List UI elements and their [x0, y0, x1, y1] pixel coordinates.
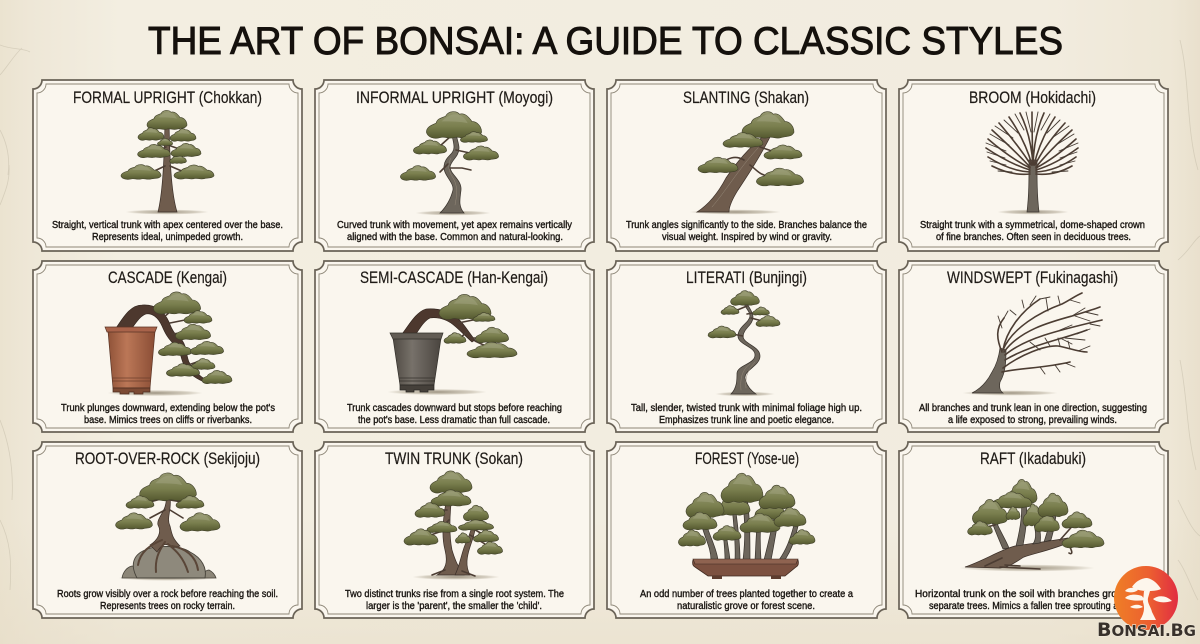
icon: broom tree [986, 112, 1078, 214]
heading: TWIN TRUNK (Sokan) [385, 450, 523, 468]
description: a life exposed to strong, prevailing winds. [948, 414, 1117, 426]
panel: raft [899, 442, 1168, 618]
logo: Bonsai.bg [1097, 566, 1196, 641]
description: Straight, vertical trunk with apex centered over the base. [52, 219, 283, 231]
description [57, 588, 278, 612]
description: An odd number of trees planted together to create a [640, 588, 853, 600]
description: of fine branches. Often seen in deciduous trees. [936, 231, 1131, 243]
icon: slanting tree [689, 112, 804, 214]
description: larger is the 'parent', the smaller the 'child'. [366, 600, 542, 612]
icon: root-over-rock tree [116, 473, 220, 581]
description: the pot's base. Less dramatic than full cascade. [358, 414, 550, 426]
icon: informal upright tree [400, 112, 499, 216]
icon: literati tree [708, 291, 780, 396]
description: Roots grow visibly over a rock before reaching the soil. [57, 588, 278, 600]
description [337, 219, 573, 243]
description: Trunk cascades downward but stops before reaching [347, 402, 562, 414]
icon: formal upright tree [121, 110, 214, 214]
icon: twin trunk tree [404, 471, 503, 580]
description: aligned with the base. Common and natural-looking. [347, 231, 563, 243]
icon: raft tree [959, 479, 1104, 572]
description [919, 402, 1147, 426]
heading: FORMAL UPRIGHT (Chokkan) [73, 89, 262, 107]
description: Curved trunk with movement, yet apex remains vertically [337, 219, 573, 231]
panel: twin trunk [315, 442, 594, 618]
panel: literati [607, 261, 886, 432]
description: visual weight. Inspired by wind or gravity. [662, 231, 832, 243]
panel: windswept [899, 261, 1168, 432]
panel: cascade [33, 261, 302, 432]
description: Horizontal trunk on the soil with branches growing as [915, 588, 1151, 600]
heading: RAFT (Ikadabuki) [980, 450, 1086, 468]
heading: BROOM (Hokidachi) [969, 89, 1096, 107]
panel: forest [607, 442, 886, 618]
icon: cascade tree in terracotta pot [105, 292, 232, 396]
description [345, 588, 564, 612]
description: base. Mimics trees on cliffs or riverbanks. [84, 414, 252, 426]
description: All branches and trunk lean in one direction, suggesting [919, 402, 1147, 414]
heading: ROOT-OVER-ROCK (Sekijoju) [75, 450, 260, 468]
description: separate trees. Mimics a fallen tree sprouting anew. [929, 600, 1137, 612]
description [61, 402, 275, 426]
heading: LITERATI (Bunjingi) [686, 269, 807, 287]
description: Emphasizes trunk line and poetic elegance. [659, 414, 834, 426]
heading: CASCADE (Kengai) [108, 269, 227, 287]
icon: forest planting in tray [678, 473, 815, 579]
icon: windswept tree [962, 293, 1102, 396]
description [915, 588, 1151, 612]
heading: FOREST (Yose-ue) [695, 450, 799, 468]
description [640, 588, 853, 612]
description [920, 219, 1145, 243]
logo tree [1125, 578, 1172, 620]
description: Represents ideal, unimpeded growth. [92, 231, 243, 243]
panel: informal upright [315, 80, 594, 251]
title: THE ART OF BONSAI: A GUIDE TO CLASSIC STYLES [148, 20, 1063, 63]
description: naturalistic grove or forest scene. [677, 600, 815, 612]
description [626, 219, 867, 243]
panel: root-over-rock [33, 442, 302, 618]
description: Trunk plunges downward, extending below the pot's [61, 402, 275, 414]
panel: slanting [607, 80, 886, 251]
heading: INFORMAL UPRIGHT (Moyogi) [356, 89, 553, 107]
description [347, 402, 562, 426]
description [631, 402, 862, 426]
panel: semi-cascade [315, 261, 594, 432]
logo sun disc [1114, 566, 1178, 630]
panel: broom [899, 80, 1168, 251]
icon: semi-cascade tree in dark pot [387, 294, 517, 395]
panel: formal upright [33, 80, 302, 251]
heading: WINDSWEPT (Fukinagashi) [947, 269, 1118, 287]
heading: SLANTING (Shakan) [683, 89, 809, 107]
description: Tall, slender, twisted trunk with minimal foliage high up. [631, 402, 862, 414]
description: Trunk angles significantly to the side. Branches balance the [626, 219, 867, 231]
description: Two distinct trunks rise from a single root system. The [345, 588, 564, 600]
description: Represents trees on rocky terrain. [100, 600, 235, 612]
description [52, 219, 283, 243]
heading: SEMI-CASCADE (Han-Kengai) [360, 269, 548, 287]
logo wordmark: BONSAI.BG [1097, 619, 1196, 641]
description: Straight trunk with a symmetrical, dome-shaped crown [920, 219, 1145, 231]
